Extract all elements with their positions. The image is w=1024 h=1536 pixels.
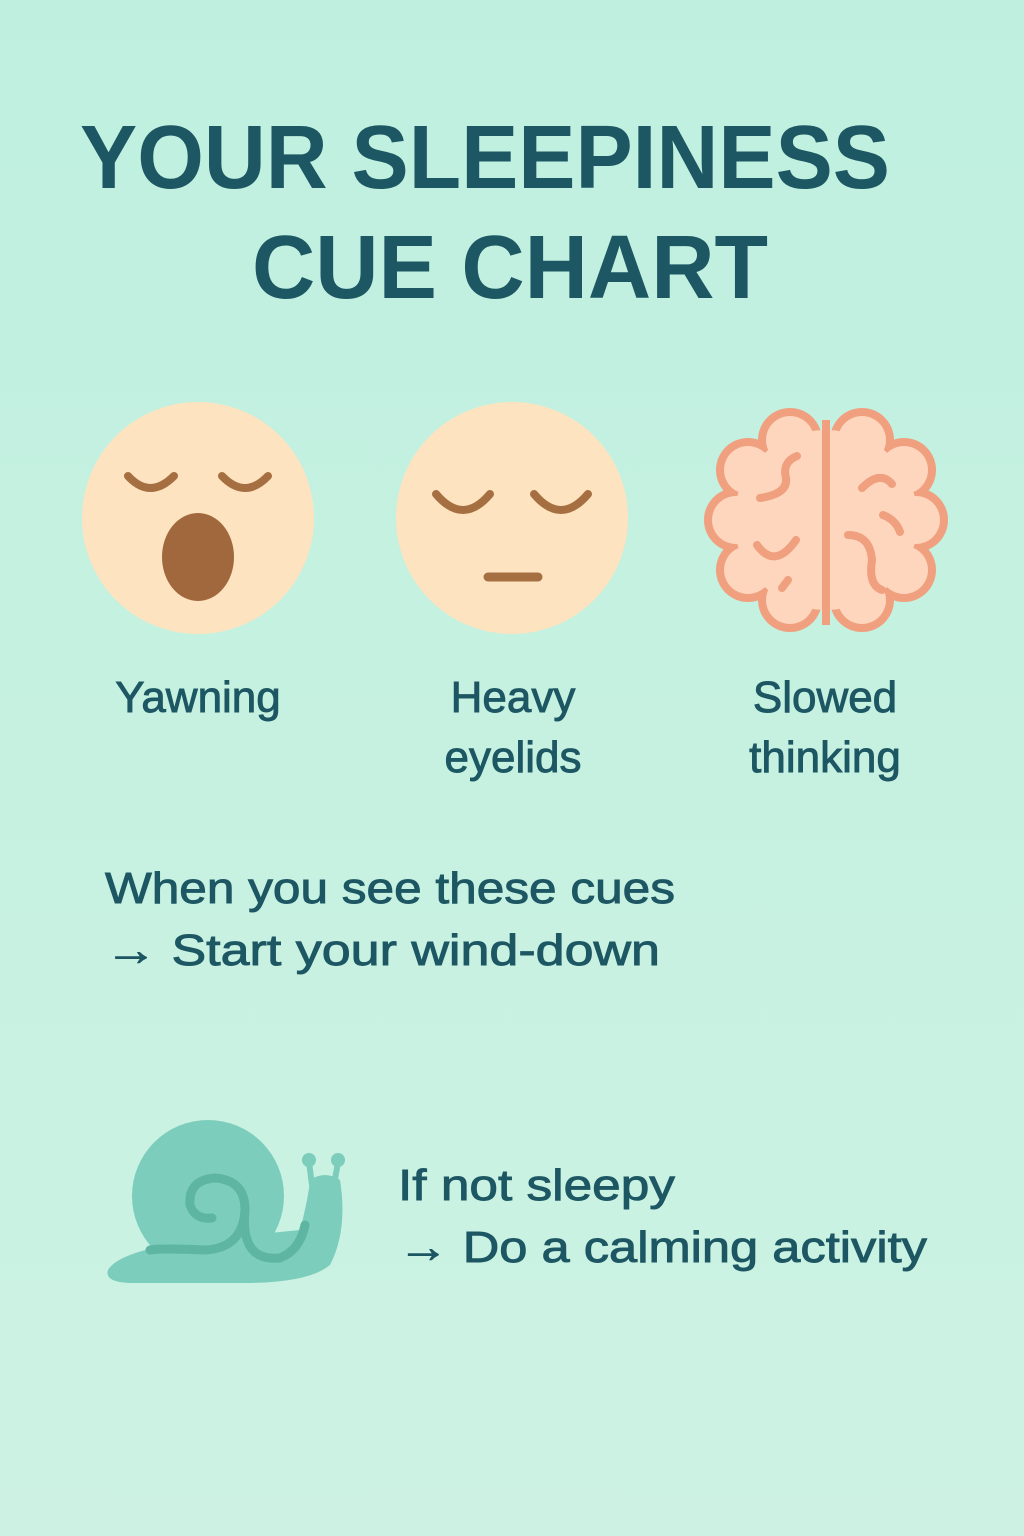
title: CUE CHART — [252, 218, 768, 318]
label: Slowed thinking: thinking — [749, 733, 901, 782]
label: Heavy eyelids — [445, 673, 581, 782]
text block: calming activity: If not sleepy — [398, 1161, 675, 1210]
title: YOUR SLEEPINESS — [80, 108, 890, 208]
label: Heavy eyelids: eyelids — [445, 733, 581, 782]
label: Slowed thinking: Slowed — [753, 673, 897, 722]
text block: wind-down instruction: When you see these cues — [105, 864, 675, 913]
text block: calming activity — [398, 1161, 927, 1272]
icon: snail — [107, 1120, 345, 1283]
title — [80, 108, 890, 318]
icon: heavy eyelids face — [396, 402, 628, 634]
text block: calming activity: → Do a calming activity — [398, 1223, 927, 1272]
text block: wind-down instruction — [105, 864, 675, 975]
icon: yawning face — [82, 402, 314, 634]
label: Yawning: Yawning — [115, 673, 281, 722]
text block: wind-down instruction: → Start your wind-down — [105, 926, 660, 975]
label: Heavy eyelids: Heavy — [451, 673, 575, 722]
icon: brain — [704, 408, 948, 632]
label: Slowed thinking — [749, 673, 901, 782]
